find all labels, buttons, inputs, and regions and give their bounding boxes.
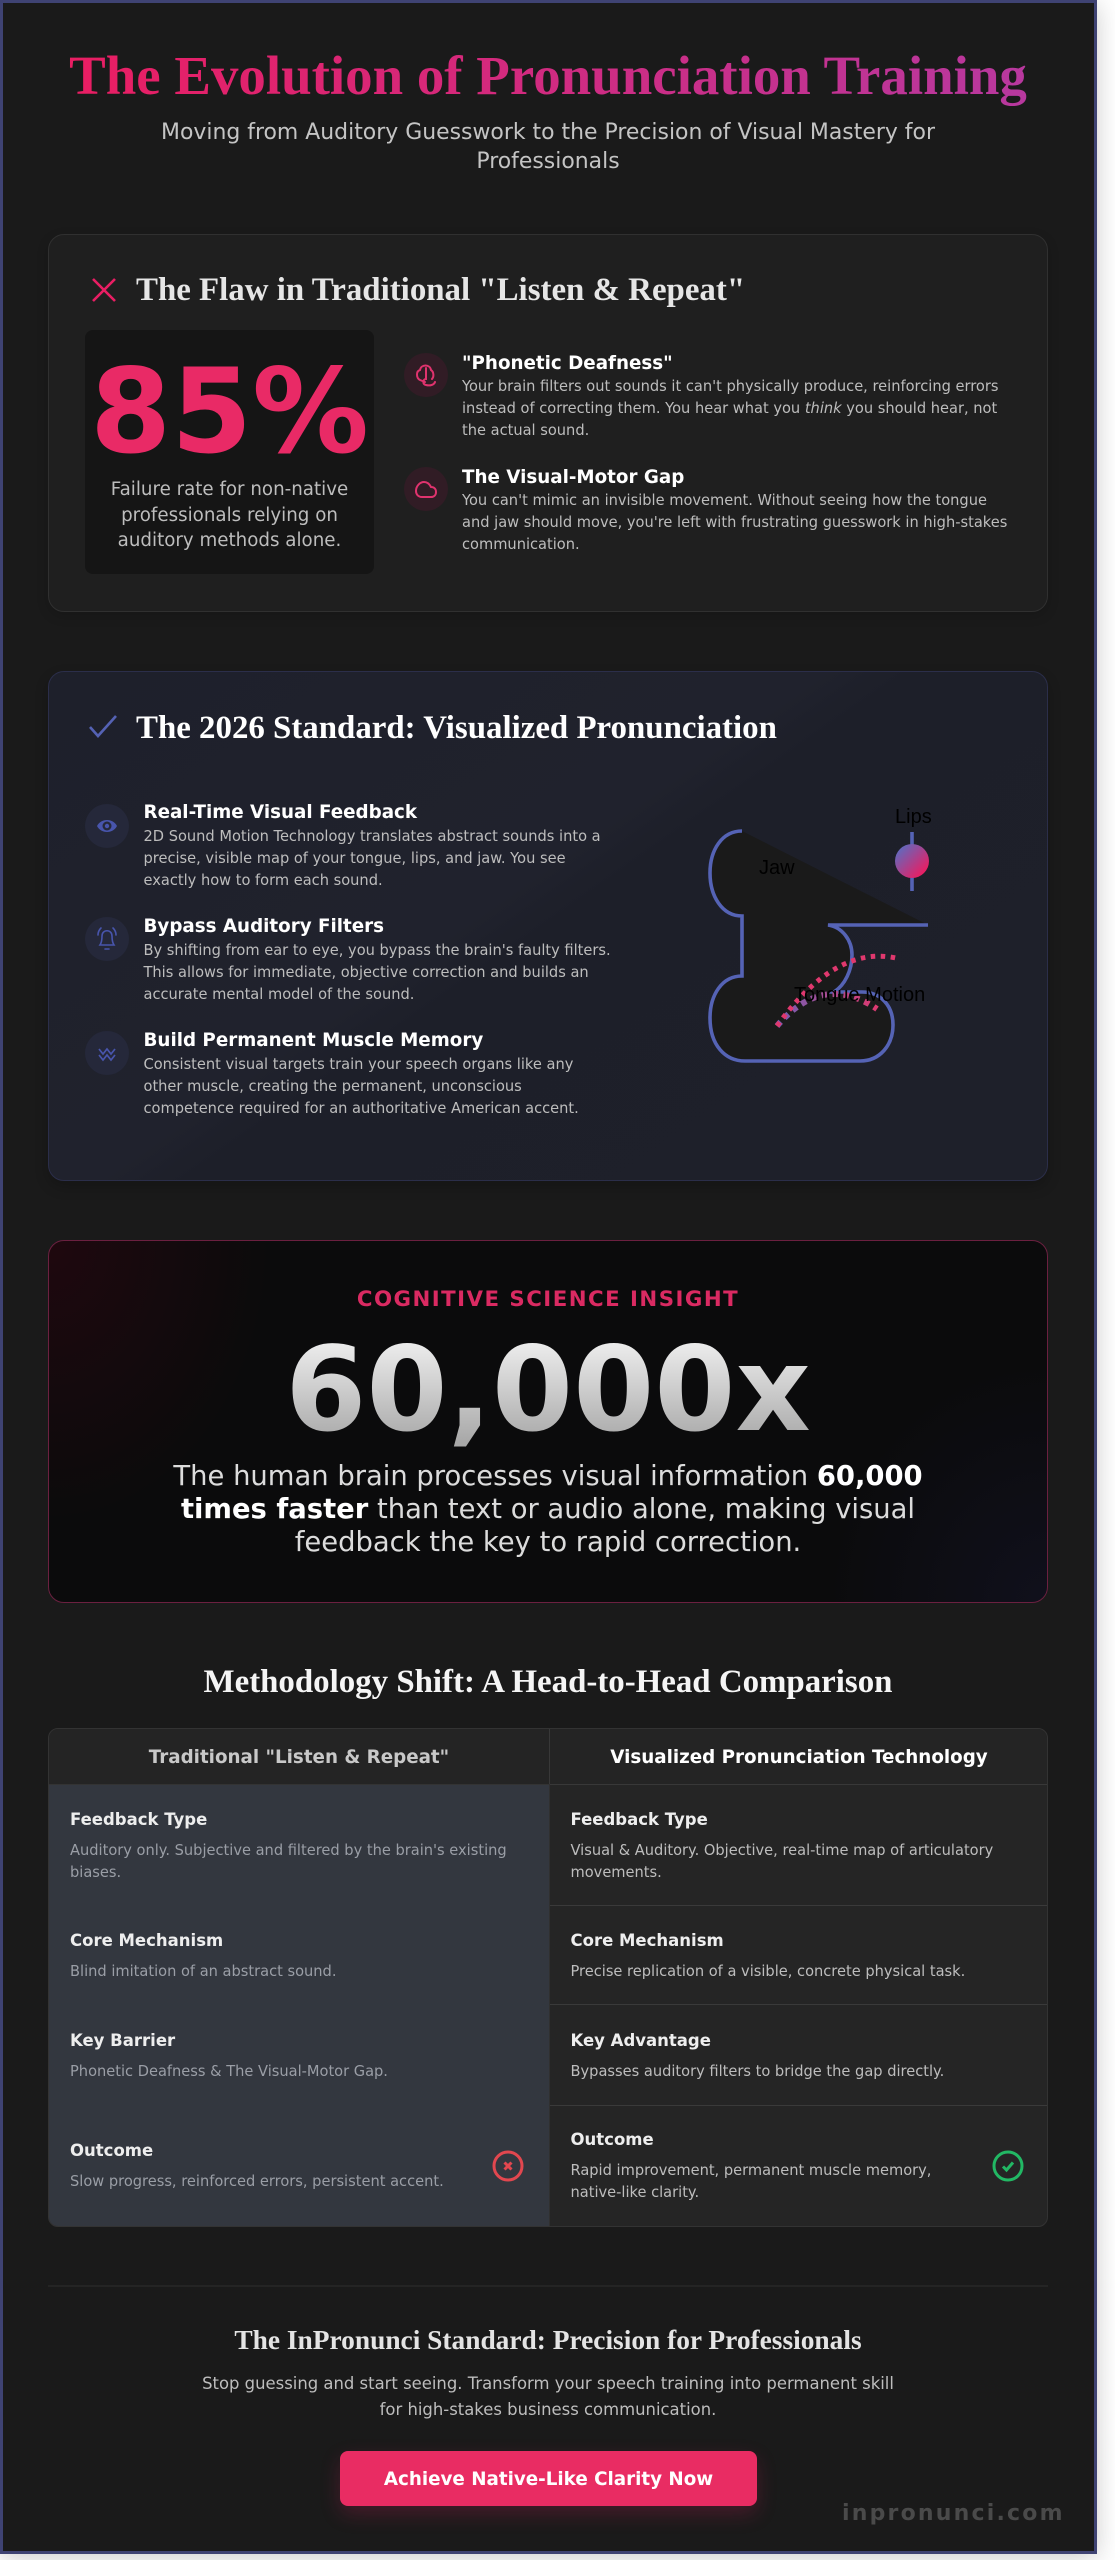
divider: right column last row [549, 2005, 1049, 2106]
item: build permanent muscle memory [144, 1030, 579, 1117]
column: traditional [49, 1784, 549, 2227]
item: build permanent muscle memory: Consistent visual targets train your speech organs like any [144, 1056, 573, 1073]
closing text: Stop guessing and start seeing. Transform your speech training into permanent skill [202, 2374, 894, 2393]
item: build permanent muscle memory: competence required for an authoritative American accent. [144, 1100, 579, 1117]
item: visual-motor gap: and jaw should move, you're left with frustrating guesswork in high-stakes [462, 514, 1007, 531]
comparison table [48, 1728, 1048, 2227]
stat box: 85 percent [85, 330, 374, 574]
button: call to action [340, 2451, 757, 2506]
panel: cognitive science insight [48, 1240, 1048, 1603]
divider: center [549, 1784, 550, 2227]
item: build permanent muscle memory: Build Permanent Muscle Memory [144, 1030, 483, 1051]
cell: advantage: Bypasses auditory filters to bridge the gap directly. [570, 2063, 944, 2080]
cell: core traditional: Core Mechanism [70, 1931, 223, 1950]
item: real-time visual feedback: 2D Sound Motion Technology translates abstract sounds into a [144, 828, 601, 845]
subtitle [161, 120, 935, 174]
insight text: feedback the key to rapid correction. [295, 1527, 801, 1558]
watermark: inpronunci.com [842, 2501, 1065, 2526]
item: real-time visual feedback [144, 802, 601, 889]
cell: outcome traditional [70, 2141, 444, 2190]
cell: outcome traditional: Outcome [70, 2141, 153, 2160]
cell: outcome visualized [570, 2130, 931, 2201]
item: phonetic deafness [462, 352, 998, 439]
cell: advantage [570, 2031, 944, 2080]
cell: outcome visualized: Rapid improvement, permanent muscle memory, [570, 2162, 931, 2179]
item: real-time visual feedback: precise, visible map of your tongue, lips, and jaw. You see [144, 850, 566, 867]
item: bypass auditory filters: accurate mental model of the sound. [144, 986, 414, 1003]
cell: feedback visualized: Visual & Auditory. Objective, real-time map of articulatory [570, 1842, 993, 1859]
insight text: The human brain processes visual information 60,000 [173, 1461, 923, 1492]
closing text: for high-stakes business communication. [380, 2400, 716, 2419]
stat: 60,000x [0, 1314, 1096, 1464]
divider line [48, 2285, 1048, 2287]
item: build permanent muscle memory: other muscle, creating the permanent, unconscious [144, 1078, 522, 1095]
icon: green check circle [992, 2150, 1024, 2182]
item: phonetic deafness: "Phonetic Deafness" [462, 352, 673, 374]
label: cognitive science insight: COGNITIVE SCIENCE INSIGHT [357, 1287, 739, 1312]
item: bypass auditory filters: This allows for immediate, objective correction and builds an [144, 964, 589, 981]
header: traditional: Traditional "Listen & Repeat" [149, 1747, 449, 1768]
icon: cloud [404, 467, 448, 511]
heading: methodology shift: Methodology Shift: A Head-to-Head Comparison [204, 1664, 892, 1700]
cell: barrier: Phonetic Deafness & The Visual-Motor Gap. [70, 2063, 388, 2080]
diagram: speech organs: Jaw [759, 857, 795, 879]
item: visual-motor gap: You can't mimic an invisible movement. Without seeing how the tongue [462, 492, 987, 509]
cell: barrier: Key Barrier [70, 2031, 175, 2050]
icon: red cross circle [492, 2150, 524, 2182]
panel: the 2026 standard [48, 671, 1048, 1181]
item: visual-motor gap [462, 466, 1007, 553]
header: traditional [49, 1729, 549, 1785]
cell: outcome traditional: Slow progress, reinforced errors, persistent accent. [70, 2173, 444, 2190]
cell: outcome visualized: native-like clarity. [570, 2184, 699, 2201]
stat caption: professionals relying on [121, 505, 338, 526]
icon: eye [85, 804, 129, 848]
item: phonetic deafness: the actual sound. [462, 422, 589, 439]
heading: flaw: The Flaw in Traditional "Listen & Repeat" [136, 272, 745, 308]
cell: feedback traditional: Feedback Type [70, 1810, 207, 1829]
item: real-time visual feedback: Real-Time Visual Feedback [144, 802, 417, 823]
insight text: times faster than text or audio alone, making visual [181, 1494, 915, 1525]
heading: InPronunci standard: The InPronunci Standard: Precision for Professionals [234, 2325, 862, 2355]
item: bypass auditory filters: By shifting from ear to eye, you bypass the brain's faulty filters. [144, 942, 611, 959]
cell: advantage: Key Advantage [570, 2031, 711, 2050]
item: visual-motor gap: The Visual-Motor Gap [462, 466, 684, 488]
stat caption: Failure rate for non-native [111, 479, 348, 500]
cell: feedback traditional [70, 1810, 507, 1881]
item: bypass auditory filters: Bypass Auditory Filters [144, 916, 384, 937]
subtitle: Professionals [476, 149, 620, 174]
icon: check mark [89, 715, 117, 738]
cell: core visualized: Core Mechanism [570, 1931, 724, 1950]
icon: bell [85, 917, 129, 961]
diagram: speech organs [708, 806, 932, 1063]
stat number: 85% [90, 345, 369, 480]
stat: 60,000x: 60,000x [285, 1322, 811, 1458]
cell: feedback traditional: Auditory only. Subjective and filtered by the brain's existing [70, 1842, 507, 1859]
title: The Evolution of Pronunciation Training [69, 45, 1027, 106]
diagram: speech organs: Tongue Motion [794, 984, 925, 1006]
icon: waves [85, 1031, 129, 1075]
item: real-time visual feedback: exactly how to form each sound. [144, 872, 383, 889]
item: phonetic deafness: Your brain filters out sounds it can't physically produce, reinforcing errors [462, 378, 998, 395]
cell: core traditional [70, 1931, 336, 1980]
diagram: speech organs: Lips [895, 806, 932, 828]
item: bypass auditory filters [143, 916, 611, 1003]
closing text [202, 2374, 894, 2419]
cell: core visualized: Precise replication of a visible, concrete physical task. [570, 1963, 965, 1980]
stat caption [111, 479, 348, 551]
cell: core visualized [570, 1931, 965, 1980]
heading: 2026 standard: The 2026 Standard: Visualized Pronunciation [136, 710, 777, 746]
header: visualized [549, 1729, 1048, 1785]
cell: feedback visualized [570, 1810, 993, 1881]
cell: feedback visualized: Feedback Type [570, 1810, 708, 1829]
item: phonetic deafness: instead of correcting them. You hear what you think you should hear, not [462, 400, 997, 417]
cell: barrier [70, 2031, 388, 2080]
cell: outcome visualized: Outcome [570, 2130, 654, 2149]
stat caption: auditory methods alone. [118, 530, 341, 551]
icon: brain [404, 353, 448, 397]
button: call to action: Achieve Native-Like Clarity Now [384, 2469, 713, 2490]
subtitle: Moving from Auditory Guesswork to the Precision of Visual Mastery for [161, 120, 935, 145]
cell: feedback visualized: movements. [570, 1864, 662, 1881]
header: visualized: Visualized Pronunciation Technology [610, 1747, 988, 1768]
icon: x mark [92, 278, 116, 302]
divider: right column rows [549, 1905, 1049, 2005]
item: visual-motor gap: communication. [462, 536, 580, 553]
insight text [173, 1461, 923, 1558]
panel: flaw in traditional listen and repeat [48, 234, 1048, 612]
cell: core traditional: Blind imitation of an abstract sound. [70, 1963, 336, 1980]
cell: feedback traditional: biases. [70, 1864, 121, 1881]
